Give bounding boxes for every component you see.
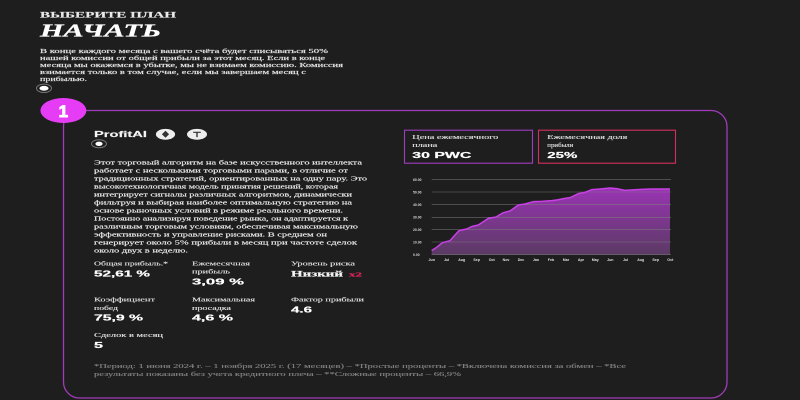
algorithm description: генерирует около 5% прибыли в месяц при частоте сделок	[94, 240, 357, 246]
stat: max drawdown	[192, 298, 255, 322]
algorithm description: различным торговым условиям, обеспечивая максимальную	[94, 224, 359, 230]
callout: monthly plan price: плана	[412, 143, 438, 149]
area chart: equity growth: Apr	[578, 258, 585, 262]
intro paragraph: взимается только в том случае, если мы завершаем месяц с	[40, 70, 307, 76]
footnote: результаты показаны без учета кредитного плеча – **Сложные проценты – 66,9%	[94, 371, 461, 378]
stat: profit factor	[291, 297, 365, 314]
callout: monthly plan price: 30 PWC	[412, 151, 472, 160]
area chart: equity growth: 60.00	[413, 178, 422, 182]
algorithm description: традиционных стратегий, ориентированных на одну пару. Это	[94, 176, 367, 182]
stat: monthly profit	[192, 261, 250, 286]
area chart: equity growth: Mar	[563, 258, 570, 262]
stat: risk level	[291, 261, 363, 278]
stat: risk level: Уровень риска	[291, 261, 356, 267]
algorithm description: основе рыночных условий в режиме реального времени.	[94, 208, 344, 214]
stat: profit factor: 4.6	[291, 305, 313, 314]
intro paragraph: прибылью.	[40, 76, 88, 83]
stat: monthly profit: прибыль	[192, 268, 231, 275]
stat: max drawdown: 4,6 %	[192, 313, 233, 322]
callout: monthly profit share: Ежемесячная доля	[547, 135, 628, 141]
stat: win rate: 75,9 %	[94, 313, 143, 322]
algorithm description: эффективность и управление рисками. В среднем он	[94, 232, 328, 238]
stat: trades per month	[94, 333, 164, 350]
intro paragraph	[40, 48, 343, 83]
icon: intro badge	[36, 84, 52, 93]
step number badge	[40, 98, 86, 123]
callout: monthly profit share: 25%	[547, 151, 577, 160]
area chart: equity growth: Aug	[458, 258, 465, 262]
algorithm description: работает с несколькими торговыми парами, в отличие от	[94, 168, 349, 174]
icon: tether	[187, 129, 207, 140]
area chart: equity growth: Sep	[652, 258, 660, 262]
area chart: equity growth: 10.00	[413, 240, 422, 244]
stat: win rate: побед	[94, 305, 118, 312]
area chart: equity growth: 40.00	[413, 203, 422, 207]
stat: total profit	[94, 260, 168, 278]
area chart: equity growth: Jul	[623, 258, 628, 262]
icon: plan badge	[92, 140, 106, 148]
area chart: equity growth: Jul	[444, 258, 449, 262]
plan name: ProfitAI	[94, 130, 147, 139]
area chart: equity growth: Sep	[473, 258, 481, 262]
callout: monthly profit share: прибыли	[547, 142, 574, 149]
panel: plan card	[64, 110, 727, 398]
stat: win rate: Коэффициент	[94, 297, 156, 304]
footnote: *Период: 1 июня 2024 г. – 1 ноября 2025 г. (17 месяцев) – *Простые проценты – *Включена комиссия за обмен – *Все	[94, 363, 627, 370]
algorithm description: около двух в неделю.	[94, 248, 189, 254]
stat: risk level: Низкий	[291, 269, 343, 278]
stat: risk level: x2	[349, 271, 363, 278]
stat: trades per month: 5	[94, 341, 104, 350]
stat: total profit: Общая прибыль.*	[94, 260, 168, 267]
area chart: equity growth: Dec	[518, 258, 524, 262]
icon: ethereum	[156, 129, 175, 140]
area chart: equity growth: Feb	[548, 258, 555, 262]
stat: trades per month: Сделок в месяц	[94, 333, 164, 339]
callout: monthly plan price	[404, 130, 532, 163]
stat: total profit: 52,61 %	[94, 269, 150, 278]
area chart: equity growth: Aug	[637, 258, 644, 262]
area chart: equity growth	[413, 178, 674, 262]
algorithm description: интегрирует сигналы различных алгоритмов, динамически	[94, 192, 353, 198]
intro paragraph: нашей комиссии от общей прибыли за этот месяц. Если в конце	[40, 55, 326, 62]
stat: monthly profit: 3,09 %	[192, 277, 244, 286]
area chart: equity growth: May	[592, 258, 599, 262]
area chart: equity growth: 30.00	[413, 216, 422, 220]
intro paragraph: месяца мы окажемся в убытке, мы не взимаем комиссию. Комиссия	[40, 62, 343, 69]
callout: monthly profit share	[538, 130, 676, 163]
algorithm description	[94, 160, 367, 254]
title: start: НАЧАТЬ	[38, 20, 161, 40]
area chart: equity growth: Jan	[533, 258, 539, 262]
area chart: equity growth: 0.00	[413, 253, 420, 257]
intro paragraph: В конце каждого месяца с вашего счёта будет списываться 50%	[40, 48, 328, 55]
callout: monthly plan price: Цена ежемесячного	[412, 135, 498, 141]
stat: max drawdown: Максимальная	[192, 298, 255, 304]
algorithm description: Этот торговый алгоритм на базе искусственного интеллекта	[94, 160, 363, 166]
area chart: equity growth: Jun	[429, 258, 435, 262]
stat: win rate	[94, 297, 156, 322]
footnote	[94, 363, 627, 378]
heading: choose plan: ВЫБЕРИТЕ ПЛАН	[40, 11, 177, 20]
area chart: equity growth: Nov	[503, 258, 509, 262]
area chart: equity growth: Oct	[489, 258, 495, 262]
area chart: equity growth: 20.00	[413, 228, 422, 232]
area chart: equity growth: 50.00	[413, 190, 422, 194]
algorithm description: фильтруя и выбирая наиболее оптимальную стратегию на	[94, 200, 353, 206]
area chart: equity growth: Oct	[667, 258, 674, 262]
area chart: equity growth: Jun	[607, 258, 613, 262]
algorithm description: Постоянно анализируя поведение рынка, он адаптируется к	[94, 216, 348, 222]
stat: monthly profit: Ежемесячная	[192, 261, 250, 267]
stat: max drawdown: просадка	[192, 306, 232, 312]
stat: profit factor: Фактор прибыли	[291, 297, 365, 304]
step number badge: 1	[59, 102, 68, 121]
algorithm description: высокотехнологичная модель принятия решений, которая	[94, 184, 338, 190]
